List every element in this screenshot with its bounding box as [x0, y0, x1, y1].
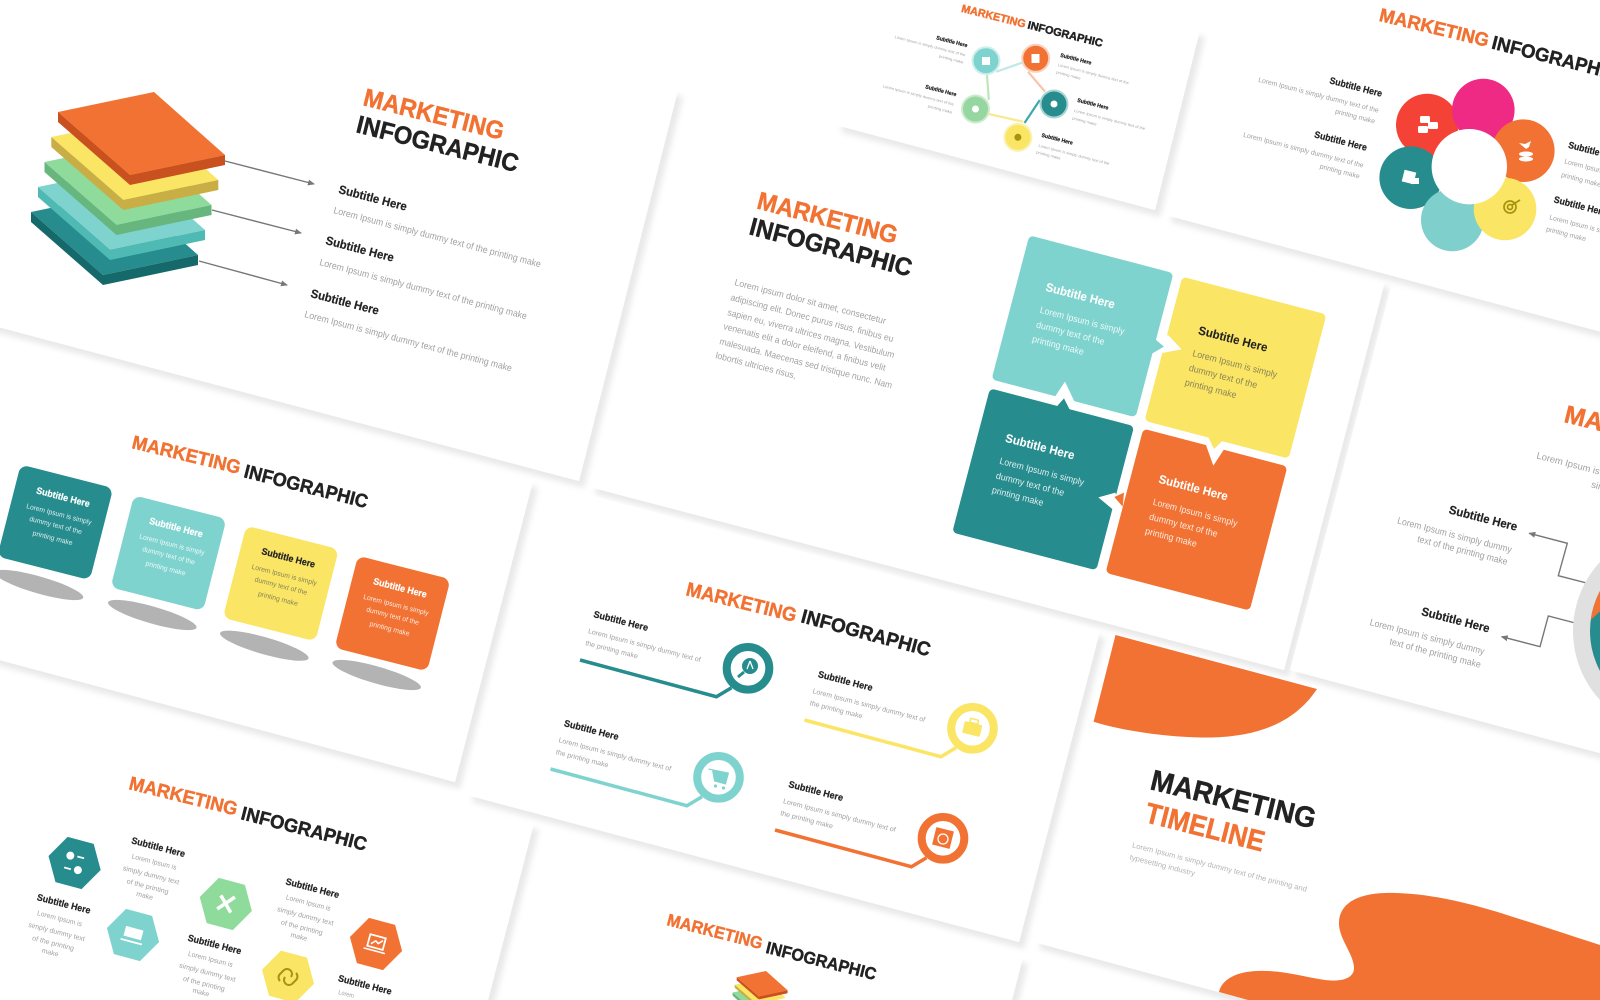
card: orange: Subtitle Here [372, 576, 428, 601]
text block: hexagon label 1: make [135, 891, 154, 902]
text block: hexagon label 2: make [41, 948, 59, 959]
title: marketing infographic: INFOGRAPHIC [799, 606, 933, 661]
text: dark teal card [991, 431, 1086, 508]
title: marketing infographic [130, 432, 370, 513]
item: light teal cart: the printing make [555, 749, 609, 769]
title: marketing infographic [684, 578, 933, 661]
card: yellow: printing make [257, 591, 299, 608]
card: orange: printing make [369, 621, 410, 638]
text block: left labels: printing make [1334, 108, 1376, 126]
title: marketing infographic: MARKETING [960, 3, 1027, 31]
card: orange: dummy text of the [365, 607, 420, 627]
text block: hexagon label 2 [27, 892, 92, 959]
text block: hexagon label 4: make [290, 932, 308, 943]
node labels: printing make [1036, 150, 1061, 161]
text block: paragraph: sapien eu, viverra ultrices magna. Vestibulum [726, 307, 896, 360]
card: light teal: Lorem Ipsum is simply [138, 533, 206, 557]
node labels: Subtitle Here [1041, 133, 1073, 147]
item: yellow briefcase [804, 669, 994, 757]
title: marketing infographic [1377, 5, 1600, 85]
text block: upper label: Lorem Ipsum is simply dummy [1396, 516, 1513, 556]
text: light teal card: Lorem Ipsum is simply [1039, 305, 1126, 336]
text block: hexagon label 3: Lorem Ipsum is [187, 951, 234, 969]
text block: three subtitles: Lorem Ipsum is simply dummy text of the printing make [318, 257, 528, 322]
callout pointers [1055, 335, 1224, 509]
title: marketing infographic [665, 910, 878, 984]
card: dark teal: Lorem Ipsum is simply [25, 503, 93, 527]
text block: hexagon label 1: Lorem Ipsum is [131, 853, 178, 872]
shape: top orange blob [1094, 635, 1317, 738]
icon: growing coins [1519, 141, 1533, 162]
text: dark teal card: Subtitle Here [1004, 431, 1076, 462]
text block: left labels: Subtitle Here [1313, 130, 1368, 154]
icon: yellow hexagon with chain link [262, 951, 314, 1000]
text block: three subtitles [303, 182, 542, 374]
node labels [882, 35, 1145, 166]
node labels: printing make [1056, 70, 1081, 81]
text block: three subtitles: Lorem Ipsum is simply dummy text of the printing make [332, 205, 542, 270]
title: marketing infographic: MARKETING [684, 578, 799, 627]
text block: three subtitles: Subtitle Here [309, 286, 381, 318]
text: orange card: dummy text of the [1148, 512, 1219, 539]
node labels: Lorem Ipsum is simply dummy text of the [1074, 109, 1145, 131]
card: orange [1106, 429, 1287, 611]
node labels: Subtitle Here [924, 84, 957, 98]
title: marketing infographic: MARKETING [665, 910, 765, 953]
shape: bottom orange blob [1219, 893, 1600, 1000]
title: marketing infographic: MARKETING [127, 773, 240, 820]
text block: lower label [1369, 604, 1492, 671]
node labels: printing make [1072, 116, 1097, 127]
text block: hexagon label 4 [276, 877, 340, 943]
text: light teal card: printing make [1031, 334, 1085, 357]
text: light teal card [1031, 280, 1126, 357]
node labels: Subtitle Here [1059, 53, 1092, 67]
card: dark teal: Subtitle Here [35, 486, 91, 510]
nodes [961, 44, 1068, 152]
text block: hexagon label 2: simply dummy text [27, 922, 85, 943]
text block: left labels: Lorem Ipsum is simply dummy text of the [1242, 132, 1364, 170]
text block: hexagon label 3: Subtitle Here [186, 933, 242, 957]
icon: orange hexagon with chart [344, 914, 408, 974]
item: orange washer: the printing make [779, 810, 834, 830]
item: orange washer: Lorem Ipsum is simply dummy text of [782, 798, 896, 834]
text: yellow card [1184, 323, 1279, 400]
title: marketing timeline: TIMELINE [1142, 797, 1268, 858]
panel: mini stack slide [505, 832, 1023, 1000]
text: light teal card: dummy text of the [1035, 320, 1106, 347]
text block: hexagon label 4: of the printing [280, 919, 323, 937]
card: yellow: dummy text of the [254, 577, 308, 597]
shadows below cards [0, 564, 423, 696]
item: teal search: the printing make [584, 640, 639, 660]
item: orange washer: Subtitle Here [787, 779, 844, 804]
item: yellow briefcase: the printing make [809, 700, 863, 720]
text block: paragraph: malesuada. Maecenas sed tristique nunc. Nam [718, 336, 894, 391]
text block: lower label: Subtitle Here [1420, 604, 1492, 636]
text: orange card: Lorem Ipsum is simply [1152, 497, 1239, 528]
title: marketing infographic: MARKETING [1377, 5, 1491, 52]
text block: right labels: printing make [1545, 226, 1587, 243]
text: orange card: Subtitle Here [1157, 472, 1230, 503]
title: marketing infographic [960, 3, 1104, 50]
text block: left labels [1242, 76, 1383, 181]
text block: paragraph [714, 277, 896, 391]
item: yellow briefcase: Lorem Ipsum is simply dummy text of [812, 688, 926, 724]
panel: callout lines slide [467, 484, 1100, 942]
text block: paragraph: adipiscing elit. Donec purus risus, finibus eu [729, 292, 895, 344]
text block: upper label: Subtitle Here [1448, 503, 1519, 534]
text block: hexagon label 4: Lorem Ipsum is [285, 894, 332, 913]
text block: lower label: Lorem Ipsum is simply dummy [1369, 617, 1486, 658]
node labels: Subtitle Here [935, 35, 968, 49]
text block: three subtitles: Subtitle Here [324, 233, 396, 265]
text block: upper label: text of the printing make [1416, 534, 1509, 568]
title: marketing infographic [354, 84, 521, 178]
text: yellow card: Lorem Ipsum is simply [1191, 348, 1279, 380]
text block: hexagon label 1: Subtitle Here [130, 836, 186, 860]
icon: stacked layers [733, 971, 788, 1000]
icon: green hexagon with tools [194, 874, 258, 934]
item: teal search [580, 609, 769, 697]
panel: floating cards slide [0, 338, 533, 782]
panel: hexagons slide [0, 680, 534, 1000]
text block: hexagon label 3: simply dummy text [178, 962, 236, 984]
card: dark teal [952, 388, 1134, 570]
text block: left labels: Subtitle Here [1328, 76, 1383, 100]
panel: donut arrows slide [1290, 328, 1600, 760]
text block: lower label: text of the printing make [1388, 637, 1482, 671]
item: teal search: Subtitle Here [592, 609, 649, 634]
text block: hexagon label 3 [178, 933, 242, 999]
text block: description: typesetting industry [1129, 853, 1196, 878]
node labels: printing make [939, 54, 964, 65]
text: orange card [1144, 472, 1239, 549]
text block: hexagon label 4: Subtitle Here [284, 877, 340, 901]
text: yellow card: dummy text of the [1188, 363, 1258, 390]
panel: network slide [836, 0, 1200, 210]
title: marketing infographic: INFOGRAPHIC [764, 938, 878, 984]
panel: flower slide [1166, 0, 1600, 401]
text: dark teal card: Lorem Ipsum is simply [998, 456, 1086, 487]
node labels: Lorem Ipsum is simply dummy text of the [894, 35, 966, 57]
icon: stacked layers [31, 92, 225, 285]
panel: timeline cover slide [1034, 635, 1600, 1000]
text block: three subtitles: Subtitle Here [337, 182, 409, 214]
card: yellow: Subtitle Here [260, 546, 316, 571]
title: marketing infographic: INFOGRAPHIC [239, 803, 369, 856]
card: light teal: printing make [145, 560, 186, 578]
text block: hexagon label 5: Subtitle Here [337, 973, 393, 998]
card: dark teal [0, 464, 113, 580]
text block: paragraph: venenatis elit a dolor eleifend, a finibus velit [722, 321, 887, 373]
panel: layered stack slide [0, 0, 678, 481]
text block: hexagon label 2: Lorem Ipsum is [36, 910, 83, 929]
chart: donut [1573, 562, 1600, 700]
text block: hexagon label 1: simply dummy text [122, 865, 180, 886]
text block: hexagon label 1: of the printing [126, 878, 169, 896]
title: marketing infographic: INFOGRAPHIC [242, 461, 370, 513]
text block: left labels: printing make [1319, 163, 1360, 181]
text block: right labels [1545, 140, 1600, 252]
title: marketing timeline: MARKETING [1147, 765, 1319, 836]
card: light teal: Subtitle Here [148, 516, 204, 540]
icon: chat bubbles [1418, 116, 1438, 133]
title: marketing infographic: INFOGRAPHIC [1026, 20, 1104, 50]
node labels: printing make [927, 104, 953, 115]
icon: teal hexagon with coins [42, 833, 107, 893]
title: marketing infographic [127, 773, 369, 856]
node labels: Lorem Ipsum is simply dummy text of the [882, 84, 954, 107]
text block: paragraph: lobortis ultricies risus, [714, 350, 797, 381]
text block: three subtitles: Lorem Ipsum is simply dummy text of the printing make [303, 309, 513, 374]
text block: paragraph: Lorem ipsum dolor sit amet, consectetur [733, 277, 887, 326]
node labels: Lorem Ipsum is simply dummy text of the [1057, 63, 1129, 85]
arrows [1502, 533, 1598, 647]
item: teal search: Lorem Ipsum is simply dummy text of [587, 628, 701, 664]
connector lines [987, 62, 1045, 123]
card: orange [335, 556, 451, 671]
node labels: Lorem Ipsum is simply dummy text of the [1038, 144, 1110, 166]
text: dark teal card: dummy text of the [995, 471, 1065, 498]
card: dark teal: printing make [32, 530, 73, 547]
text block: hexagon label 4: simply dummy text [276, 906, 334, 927]
text block: left labels: Lorem Ipsum is simply dummy text of the [1257, 77, 1379, 115]
item: yellow briefcase: Subtitle Here [817, 669, 874, 694]
text block: hexagon label 2: of the printing [31, 935, 75, 953]
text: light teal card: Subtitle Here [1044, 280, 1117, 311]
item: light teal cart [550, 718, 740, 806]
text block: description: Lorem Ipsum is simply dummy text of the printing and [1131, 841, 1308, 894]
chart: four interlocking speech cards [952, 235, 1326, 611]
text: orange card: printing make [1144, 526, 1198, 549]
text block: hexagon label 1 [122, 836, 186, 902]
icon: shopping bag [1402, 170, 1419, 184]
card: light teal [992, 235, 1173, 417]
title: marketing infographic: MARKETING [130, 432, 243, 479]
item: light teal cart: Subtitle Here [563, 718, 620, 743]
title: marketing infographic: INFOGRAPHIC [354, 111, 521, 178]
card: dark teal: dummy text of the [28, 516, 83, 536]
panel: four speech cards slide [590, 97, 1385, 670]
chart: flower petals [1379, 79, 1555, 251]
text block: hexagon label 3: of the printing [182, 976, 226, 993]
text: dark teal card: printing make [991, 485, 1045, 508]
card: yellow: Lorem Ipsum is simply [251, 564, 318, 588]
card: yellow [1145, 277, 1326, 459]
title: marketing infographic [746, 187, 915, 282]
text block: hexagon label 3: make [192, 987, 210, 999]
text: yellow card: Subtitle Here [1197, 323, 1269, 355]
card: yellow [223, 526, 339, 641]
text block: upper label [1396, 503, 1519, 568]
item: light teal cart: Lorem Ipsum is simply dummy text of [558, 737, 672, 773]
node labels: Subtitle Here [1076, 98, 1109, 112]
card: light teal: dummy text of the [141, 546, 196, 566]
title: marketing infographic: INFOGRAPHIC [746, 213, 915, 282]
item: orange washer [775, 779, 964, 867]
icon: light teal hexagon with cake [101, 905, 165, 965]
title: marketing infographic: MARKETING [361, 84, 507, 146]
text block: hexagon label 2: Subtitle Here [36, 892, 92, 917]
text: yellow card: printing make [1184, 377, 1238, 400]
arrows from layers [199, 161, 314, 285]
card: light teal [111, 495, 227, 611]
card: orange: Lorem Ipsum is simply [362, 594, 430, 618]
icon: target [1504, 200, 1520, 213]
title: marketing infographic: MARKETING [754, 187, 901, 250]
